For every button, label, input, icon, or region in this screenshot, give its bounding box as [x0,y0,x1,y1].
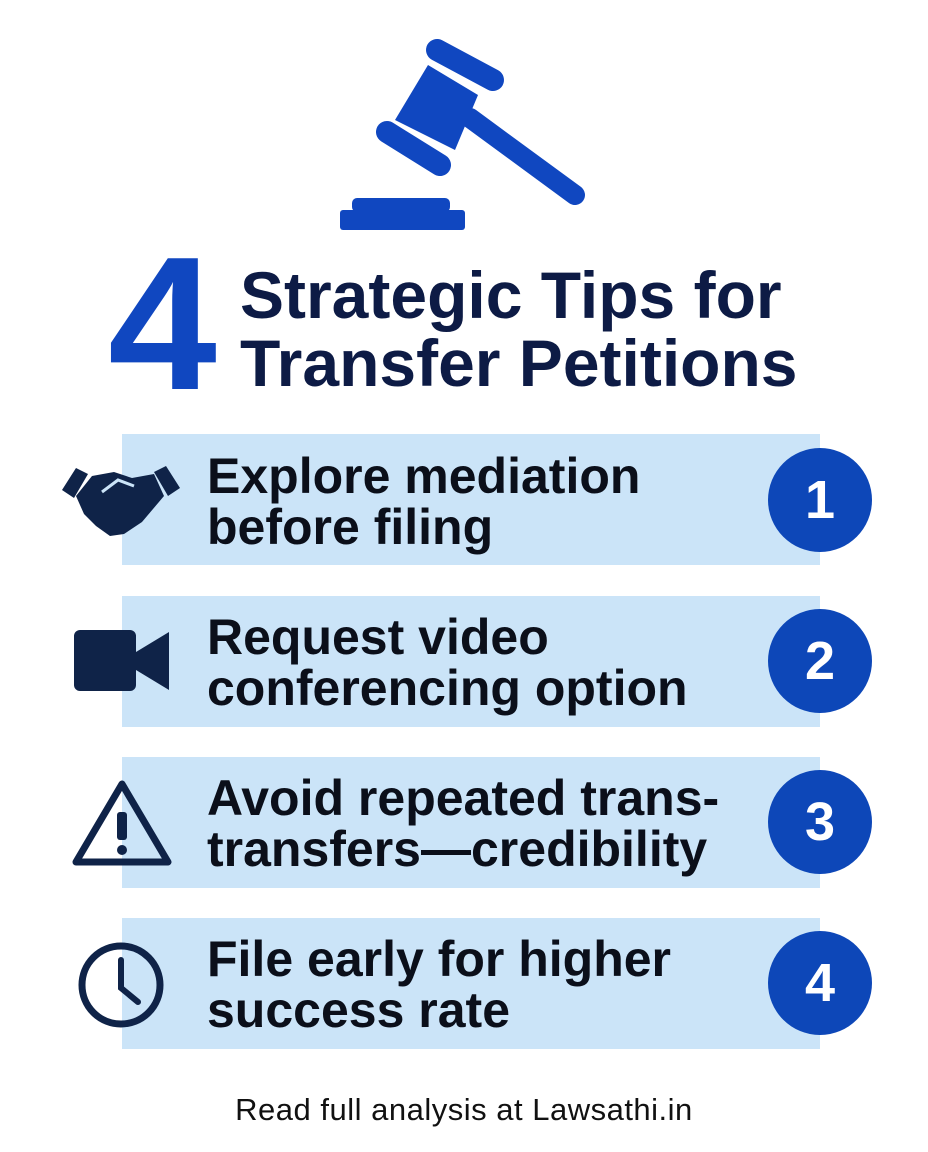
tip 3 text: Avoid repeated trans- [207,770,719,826]
tip 2 text [207,609,688,716]
tip 1 text [207,448,640,555]
number badge 4: 4 [805,953,835,1013]
tip 2 text: conferencing option [207,660,688,716]
number badge 1: 1 [805,470,835,530]
number badge 3 [768,770,872,874]
title text: Strategic Tips for [240,258,782,332]
tip 2 text: Request video [207,609,549,665]
tip 3 text: transfers—credibility [207,821,707,877]
panel: tip 1 [122,434,820,565]
panel: tip 4 [122,918,820,1049]
title [108,218,798,430]
icon: clock [78,942,164,1028]
panel: tip 2 [122,596,820,727]
tip 1 text: before filing [207,499,493,555]
number badge 2: 2 [805,631,835,691]
title text: Transfer Petitions [240,326,798,400]
number badge 4 [768,931,872,1035]
tip 1 text: Explore mediation [207,448,640,504]
tip 4 text: success rate [207,982,510,1038]
number badge 3: 3 [805,792,835,852]
tip 4 text [207,931,671,1038]
title text [240,258,798,400]
panel: tip 3 [122,757,820,888]
icon: warning [72,780,172,866]
big number 4: 4 [108,218,217,430]
number badge 2 [768,609,872,713]
icon: video camera [74,630,169,691]
icon: handshake [62,466,180,536]
footer: Read full analysis at Lawsathi.in [235,1092,693,1127]
tip 3 text [207,770,719,877]
icon: gavel [340,39,585,230]
tip 4 text: File early for higher [207,931,671,987]
number badge 1 [768,448,872,552]
